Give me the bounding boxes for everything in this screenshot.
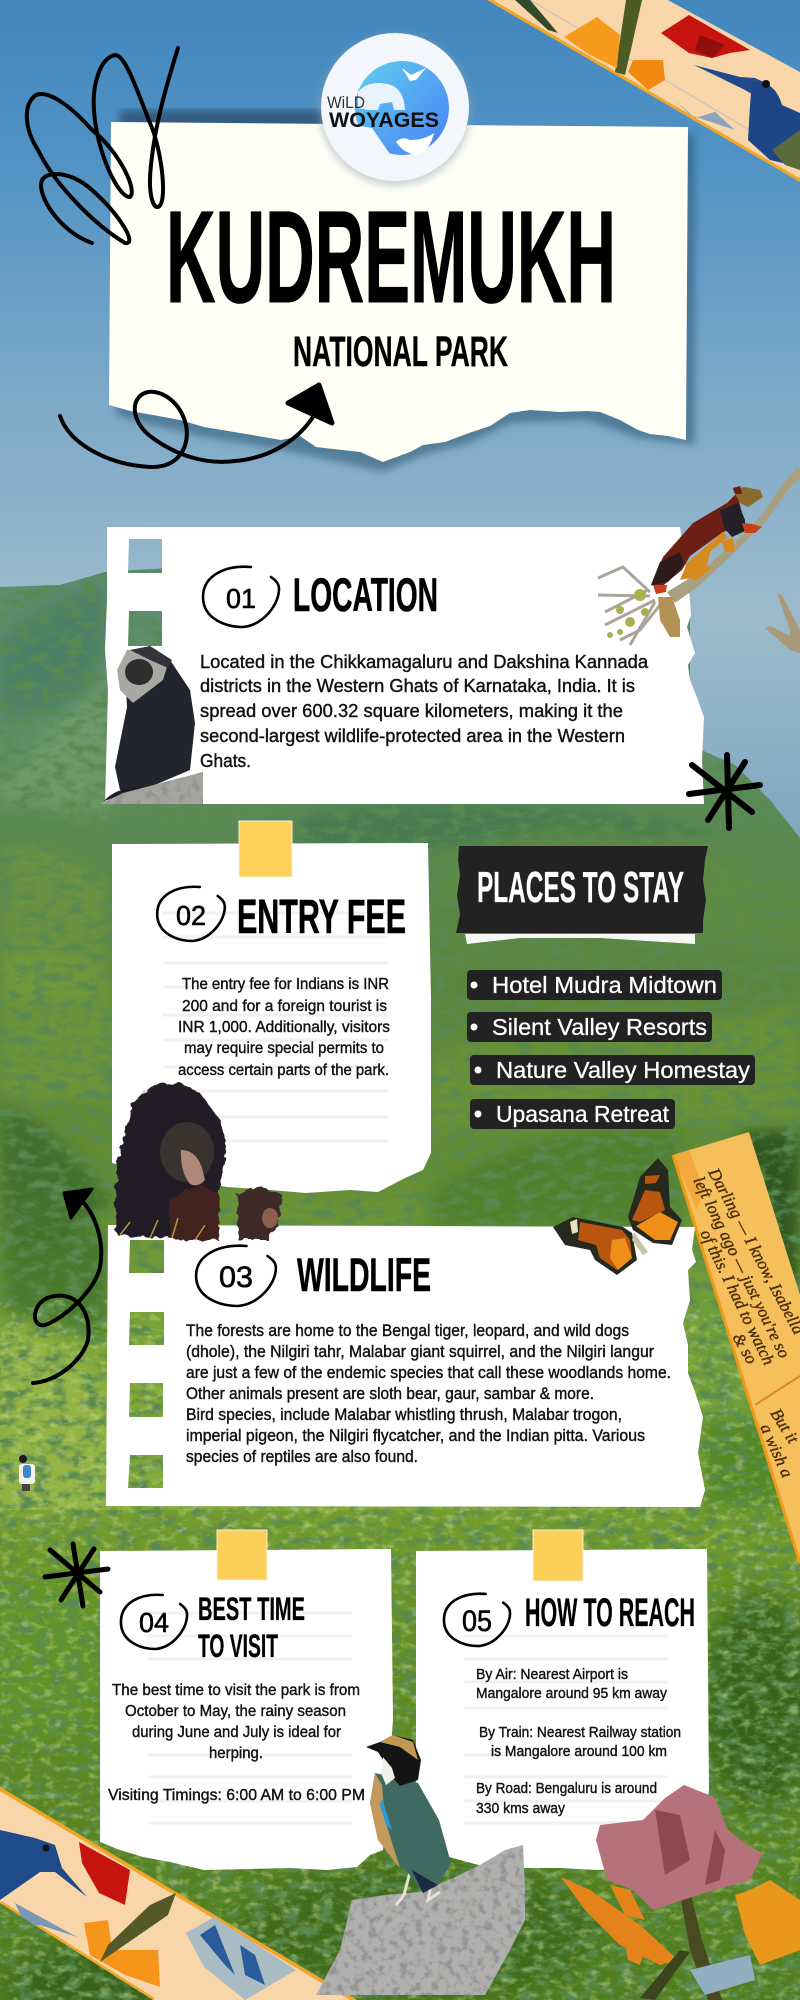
list item: Silent Valley Resorts: Silent Valley Resorts	[492, 1014, 707, 1040]
dark heading banner	[456, 846, 708, 933]
elephant silhouette	[358, 83, 405, 110]
section number 04	[121, 1595, 187, 1649]
body text: best time: Visiting Timings: 6:00 AM to 6:00 PM	[108, 1787, 365, 1804]
orange sprig	[561, 1877, 678, 1965]
logo wordmark: WiLD	[327, 93, 365, 112]
decorative tape: bottom left	[0, 1787, 357, 2000]
photo: squirrel on branch	[598, 467, 800, 645]
panel: 04 best time to visit	[100, 1530, 393, 1870]
tail	[658, 597, 680, 637]
twigs and leaves	[598, 567, 660, 645]
tape	[239, 821, 292, 877]
blue tape	[690, 1955, 755, 1995]
body text: wildlife: (dhole), the Nilgiri tahr, Malabar giant squirrel, and the Nilgiri langur	[186, 1343, 654, 1361]
body text: how to reach: Mangalore around 95 km away	[476, 1685, 667, 1702]
bird body	[370, 1773, 451, 1893]
body text: location: districts in the Western Ghats of Karnataka, India. It is	[200, 676, 635, 696]
panel: 02 entry fee	[112, 821, 431, 1193]
paper sheet	[112, 843, 431, 1193]
section number 02	[157, 887, 225, 941]
paper sheet	[416, 1549, 709, 1870]
body text: entry fee	[178, 976, 390, 1079]
panel: 01 location	[100, 467, 800, 828]
logo wordmark	[327, 93, 439, 132]
body text: wildlife: species of reptiles are also found.	[186, 1448, 418, 1466]
body text: location: Ghats.	[200, 751, 251, 771]
body text: best time: herping.	[209, 1745, 263, 1762]
white torn strip	[465, 934, 695, 944]
brush mark	[355, 125, 392, 157]
list item: Hotel Mudra Midtown: Hotel Mudra Midtown	[492, 972, 717, 998]
body text: how to reach: is Mangalore around 100 km	[491, 1743, 667, 1760]
body text: location	[200, 652, 649, 771]
section number 02: 02	[176, 900, 206, 931]
section number 01: 01	[226, 583, 256, 614]
bird legs	[396, 1872, 440, 1905]
doodle: scribble loops	[27, 48, 178, 243]
decorative strip: handwritten paper: left long ago — just you're so	[689, 1173, 794, 1361]
body text: wildlife	[186, 1322, 671, 1466]
tape	[533, 1530, 583, 1581]
paper sheet	[100, 1549, 393, 1870]
photo: lion-tailed macaque	[100, 646, 203, 804]
decorative strip: handwritten paper	[673, 1132, 800, 1563]
doodle: curly arrow left	[33, 1189, 101, 1383]
torn paper sheet	[109, 122, 688, 462]
tape	[217, 1530, 267, 1580]
illustration: pink flower and orange leaves	[561, 1785, 800, 2000]
whale silhouette	[396, 133, 434, 155]
section number 01	[203, 567, 279, 627]
body text: entry fee: may require special permits to	[184, 1040, 384, 1057]
torn paper with binder holes	[106, 1225, 705, 1507]
body text: how to reach: 330 kms away	[476, 1800, 565, 1817]
heading: best time to visit: BEST TIME	[198, 1591, 305, 1627]
body text: best time: The best time to visit the park is from	[112, 1682, 360, 1699]
orange belly and legs	[680, 532, 728, 580]
icon: black asterisk lower	[45, 1544, 108, 1606]
icon: black asterisk	[689, 755, 760, 828]
decorative strip: handwritten paper: & so	[729, 1330, 761, 1367]
heading: entry fee: ENTRY FEE	[237, 891, 406, 944]
body text: entry fee: access certain parts of the park.	[178, 1062, 389, 1079]
body text: entry fee: INR 1,000. Additionally, visitors	[178, 1019, 390, 1036]
decorative tape: top right	[487, 0, 800, 182]
body text: how to reach: By Air: Nearest Airport is	[476, 1666, 628, 1683]
body text: how to reach: By Road: Bengaluru is around	[476, 1780, 657, 1797]
body text: best time	[108, 1682, 365, 1804]
torn paper with binder holes	[105, 527, 704, 804]
orange flower right	[735, 1880, 800, 1965]
doodle: curly arrow to title	[60, 385, 332, 467]
section number 03: 03	[219, 1261, 253, 1294]
list item: Nature Valley Homestay: Nature Valley Homestay	[496, 1057, 751, 1083]
logo badge	[319, 33, 471, 186]
panel: places to stay	[456, 846, 755, 1129]
bird silhouette	[402, 68, 426, 81]
list item: Upasana Retreat: Upasana Retreat	[496, 1101, 670, 1127]
section number 04: 04	[139, 1607, 169, 1638]
body text: location: second-largest wildlife-protected area in the Western	[200, 726, 625, 746]
body text: entry fee: The entry fee for Indians is INR	[182, 976, 389, 993]
body text: how to reach: By Train: Nearest Railway station	[479, 1724, 681, 1741]
body text: location: spread over 600.32 square kilometers, making it the	[200, 701, 623, 721]
body text: best time: during June and July is ideal for	[132, 1724, 342, 1741]
body text: wildlife: imperial pigeon, the Nilgiri flycatcher, and the Indian pitta. Various	[186, 1427, 645, 1445]
photo: fairy pitta bird on rock	[316, 1735, 525, 1995]
body text: wildlife: are just a few of the endemic species that call these woodlands home.	[186, 1364, 671, 1382]
decorative strip: handwritten paper: of this. I had to watch	[696, 1226, 778, 1368]
section number 03	[196, 1246, 276, 1306]
panel: 05 how to reach	[416, 1530, 709, 1870]
heading: best time to visit	[198, 1591, 305, 1664]
photo: far right branch	[765, 593, 800, 653]
heading: wildlife: WILDLIFE	[297, 1248, 431, 1301]
photo: hiker	[19, 1455, 35, 1491]
body text: how to reach	[476, 1666, 681, 1817]
photo: sloth bear and cub	[115, 1083, 283, 1240]
body text: best time: October to May, the rainy season	[125, 1703, 346, 1720]
branch	[667, 467, 800, 603]
bird head	[366, 1735, 421, 1786]
body text: wildlife: The forests are home to the Bengal tiger, leopard, and wild dogs	[186, 1322, 629, 1340]
body text: entry fee: 200 and for a foreign tourist is	[182, 998, 387, 1015]
heading: location: LOCATION	[293, 568, 438, 621]
photo: butterfly	[553, 1158, 682, 1275]
section number 05	[444, 1594, 510, 1646]
pink petals	[596, 1785, 763, 1910]
logo wordmark: WOYAGES	[329, 109, 439, 132]
stems	[680, 1890, 722, 2000]
heading: best time to visit: TO VISIT	[198, 1628, 278, 1664]
section number 05: 05	[462, 1605, 492, 1638]
decorative strip: handwritten paper: a wish a	[756, 1421, 797, 1480]
body text: wildlife: Other animals present are sloth bear, gaur, sambar & more.	[186, 1385, 594, 1403]
body text: wildlife: Bird species, include Malabar whistling thrush, Malabar trogon,	[186, 1406, 622, 1424]
body	[651, 493, 745, 588]
title paper panel	[109, 110, 695, 472]
body text: location: Located in the Chikkamagaluru and Dakshina Kannada	[200, 652, 649, 672]
rock	[316, 1845, 525, 1995]
subtitle: NATIONAL PARK	[293, 328, 508, 376]
panel: 03 wildlife	[106, 1225, 705, 1507]
head	[733, 487, 763, 507]
